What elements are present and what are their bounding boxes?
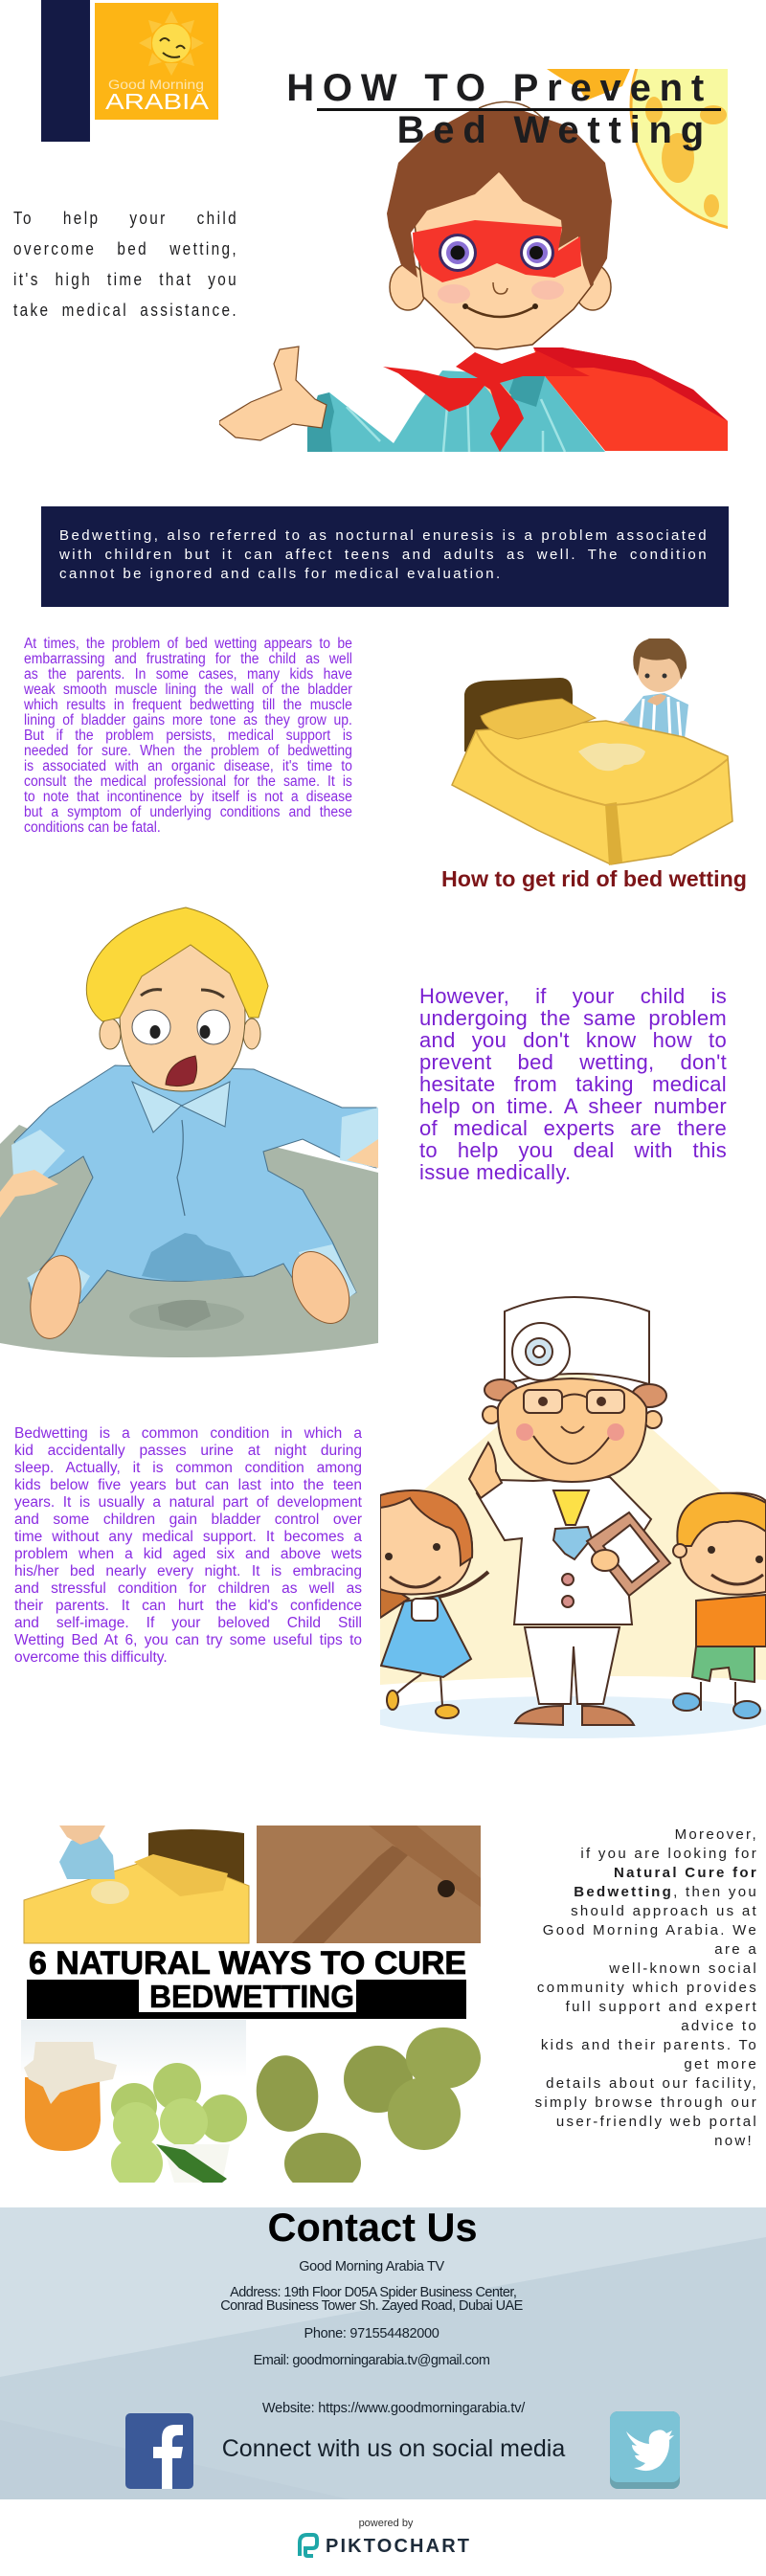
icon: facebook bbox=[125, 2413, 193, 2489]
right-aligned text: about Good Morning Arabia: full support and expert bbox=[566, 1999, 758, 2015]
definition text bbox=[59, 527, 709, 582]
coat bbox=[477, 1477, 651, 1624]
right-aligned text: about Good Morning Arabia bbox=[535, 1826, 758, 2149]
title: Bed Wetting bbox=[397, 109, 712, 151]
title bbox=[286, 67, 712, 151]
Piktochart logo bbox=[298, 2533, 469, 2558]
right-aligned text: about Good Morning Arabia: simply browse through our bbox=[535, 2094, 758, 2111]
finger hand bbox=[469, 1443, 502, 1498]
hero illustration: masked boy with cape bbox=[219, 69, 728, 452]
right-aligned text: about Good Morning Arabia: Bedwetting, then you bbox=[574, 1884, 758, 1900]
panel: definition band bbox=[41, 506, 729, 607]
headline text: 6 NATURAL WAYS TO CURE bbox=[29, 1945, 466, 1982]
intro text: overcome bed wetting, bbox=[13, 239, 238, 258]
nose bbox=[493, 282, 507, 294]
purple paragraph: embarrassment and causes: as the parents. In some cases, many kids have bbox=[24, 666, 352, 683]
purple paragraph: common condition: sleep. Actually, it is common condition among bbox=[14, 1460, 362, 1476]
shoes bbox=[515, 1706, 563, 1725]
headline word: BEDWETTING bbox=[149, 1979, 354, 2014]
shirt bbox=[307, 370, 605, 452]
headline white box bbox=[139, 1980, 356, 2012]
purple paragraph: seek help: hesitate from taking medical bbox=[419, 1072, 727, 1096]
intro text bbox=[13, 209, 238, 320]
panel: contact background bbox=[0, 2207, 766, 2499]
right-aligned text: about Good Morning Arabia: user-friendly web portal bbox=[556, 2114, 758, 2130]
hat bbox=[505, 1297, 649, 1384]
face bbox=[414, 165, 593, 349]
phone: Phone: 971554482000 bbox=[304, 2326, 439, 2341]
eyes bbox=[132, 1010, 170, 1044]
boy's ears bbox=[390, 264, 611, 310]
head bbox=[120, 940, 245, 1091]
purple paragraph: common condition: and self-image. If your beloved Child Still bbox=[14, 1615, 362, 1631]
purple paragraph: common condition: years. It is usually a natural part of development bbox=[14, 1494, 362, 1511]
purple paragraph: embarrassment and causes: consult the medical professional for the same. It is bbox=[24, 773, 352, 790]
purple paragraph: seek help: help on time. A sheer number bbox=[419, 1094, 727, 1118]
purple paragraph: embarrassment and causes: lining of bladder gains more tone as they grow up. bbox=[24, 712, 352, 728]
logo: Good Morning Arabia: ARABIA bbox=[105, 89, 210, 114]
right-aligned text: about Good Morning Arabia: kids and their parents. To bbox=[541, 2037, 758, 2053]
blanket stain bbox=[129, 1302, 244, 1331]
purple paragraph: common condition: Wetting Bed At 6, you can try some useful tips to bbox=[14, 1632, 362, 1648]
bed cover bbox=[452, 721, 732, 864]
purple paragraph: common condition: his/her bed nearly every night. It is embracing bbox=[14, 1563, 362, 1579]
bed folds bbox=[605, 802, 622, 865]
cinnamon photo bbox=[257, 1826, 481, 1943]
eyes bbox=[439, 234, 554, 272]
logo mark bbox=[300, 2535, 317, 2556]
illustration: worried boy on wet blanket bbox=[0, 907, 378, 1357]
wet patch bbox=[142, 1233, 244, 1281]
right-aligned text: about Good Morning Arabia: well-known social bbox=[609, 1960, 758, 1977]
smile bbox=[533, 1436, 610, 1464]
illustration: boy beside wet bed bbox=[441, 638, 747, 891]
cream backdrop bbox=[380, 1359, 766, 1685]
boy bbox=[617, 636, 688, 740]
cuffs bbox=[11, 1130, 65, 1187]
purple paragraph: common condition: kid accidentally passes urine at night during bbox=[14, 1443, 362, 1459]
boy bbox=[673, 1493, 766, 1718]
hands bbox=[0, 1170, 58, 1218]
definition text: cannot be ignored and calls for medical evaluation. bbox=[59, 566, 503, 582]
icon: twitter bbox=[610, 2411, 680, 2489]
scarf bbox=[383, 351, 590, 452]
photo fade background bbox=[21, 2020, 246, 2077]
logo: Good Morning Arabia: Good Morning bbox=[108, 78, 204, 92]
honey jar bbox=[24, 2042, 117, 2151]
tie/stethoscope bbox=[553, 1527, 592, 1559]
ankle cuffs bbox=[27, 1257, 90, 1333]
purple paragraph: seek help: However, if your child is bbox=[419, 984, 727, 1008]
purple paragraph: common condition: Bedwetting is a common condition in which a bbox=[14, 1425, 362, 1442]
purple paragraph: seek help: to help you deal with this bbox=[419, 1138, 727, 1162]
purple paragraph: common condition: their parents. It can hurt the kid's confidence bbox=[14, 1598, 362, 1614]
logo word: PIKTOCHART bbox=[326, 2536, 469, 2557]
purple paragraph: embarrassment and causes bbox=[24, 636, 352, 836]
purple paragraph: embarrassment and causes: At times, the problem of bed wetting appears to be bbox=[24, 636, 352, 652]
ears bbox=[100, 1019, 121, 1049]
collage: 6 natural ways to cure bedwetting bbox=[21, 1826, 481, 2183]
doctor bbox=[469, 1297, 670, 1725]
intro text: take medical assistance. bbox=[13, 301, 238, 320]
right-aligned text: about Good Morning Arabia: should approach us at bbox=[571, 1903, 758, 1919]
glasses bbox=[524, 1390, 562, 1413]
trousers bbox=[525, 1627, 620, 1704]
yellow shirt bbox=[553, 1490, 589, 1525]
purple paragraph: common condition: problem when a kid aged six and above wets bbox=[14, 1546, 362, 1562]
icon: sun bbox=[547, 0, 766, 231]
address: Conrad Business Tower Sh. Zayed Road, Dubai UAE bbox=[220, 2298, 523, 2314]
purple paragraph: embarrassment and causes: but a symptom of underlying conditions and these bbox=[24, 804, 352, 820]
face bbox=[498, 1378, 646, 1482]
right-aligned text: about Good Morning Arabia: community which provides bbox=[537, 1980, 758, 1996]
curly hair bbox=[484, 1379, 517, 1400]
logo: Good Morning Arabia bbox=[95, 3, 218, 120]
smile bbox=[465, 306, 535, 317]
social media label: Connect with us on social media bbox=[222, 2435, 565, 2462]
bed photo bbox=[24, 1826, 249, 1943]
purple paragraph: common condition bbox=[14, 1425, 362, 1666]
contact details bbox=[220, 2259, 525, 2416]
hand thumbs up bbox=[219, 347, 327, 440]
right-aligned text: about Good Morning Arabia: get more bbox=[684, 2056, 758, 2072]
purple paragraph: common condition: time without any medical support. It becomes a bbox=[14, 1529, 362, 1545]
body: pajamas bbox=[14, 1065, 376, 1331]
definition text: with children but it can affect teens and adults as well. The condition bbox=[59, 547, 709, 563]
purple paragraph: embarrassment and causes: which results in frequent bedwetting till the muscle bbox=[24, 697, 352, 713]
right-aligned text: about Good Morning Arabia: advice to bbox=[681, 2018, 758, 2034]
purple paragraph: seek help: issue medically. bbox=[419, 1160, 571, 1184]
intro text: To help your child bbox=[13, 209, 238, 228]
company name: Good Morning Arabia TV bbox=[299, 2259, 444, 2274]
title: HOW TO Prevent bbox=[286, 67, 712, 109]
email: Email: goodmorningarabia.tv@gmail.com bbox=[254, 2353, 489, 2368]
definition text: Bedwetting, also referred to as nocturnal enuresis is a problem associated bbox=[59, 527, 709, 544]
purple paragraph: seek help bbox=[419, 984, 727, 1184]
mouth bbox=[166, 1056, 197, 1086]
shirt sleeve shade bbox=[307, 392, 334, 452]
hair bbox=[387, 108, 612, 287]
mask bbox=[413, 220, 581, 282]
collar bbox=[132, 1082, 230, 1132]
purple paragraph: seek help: undergoing the same problem bbox=[419, 1006, 727, 1030]
purple paragraph: seek help: prevent bed wetting, don't bbox=[419, 1050, 727, 1074]
purple paragraph: seek help: of medical experts are there bbox=[419, 1116, 727, 1140]
purple paragraph: embarrassment and causes: embarrassing and frustrating for the child as well bbox=[24, 651, 352, 667]
website: Website: https://www.goodmorningarabia.tv/ bbox=[262, 2401, 525, 2416]
girl bbox=[380, 1490, 488, 1718]
purple paragraph: embarrassment and causes: is associated with an organic disease, it's time to bbox=[24, 758, 352, 774]
purple paragraph: common condition: kids below five years but can last into the teen bbox=[14, 1477, 362, 1493]
purple paragraph: common condition: and stressful condition for children as well as bbox=[14, 1580, 362, 1597]
right-aligned text: about Good Morning Arabia: details about our facility, bbox=[546, 2075, 758, 2092]
purple paragraph: seek help: and you don't know how to bbox=[419, 1028, 727, 1052]
title underline bbox=[317, 108, 721, 111]
pillow bbox=[481, 699, 596, 739]
navy accent bar bbox=[41, 0, 90, 142]
right-aligned text: about Good Morning Arabia: if you are looking for bbox=[580, 1846, 758, 1862]
blanket bbox=[0, 1125, 378, 1357]
purple paragraph: embarrassment and causes: weak smooth muscle lining the wall of the bladder bbox=[24, 682, 352, 698]
illustration: doctor with two children bbox=[380, 1296, 766, 1738]
headboard bbox=[464, 678, 573, 756]
headline black bar bbox=[27, 1980, 466, 2019]
ears bbox=[483, 1406, 500, 1423]
olives bbox=[251, 2027, 481, 2194]
right-aligned text: about Good Morning Arabia: are a bbox=[714, 1941, 758, 1958]
purple paragraph: common condition: overcome this difficulty. bbox=[14, 1649, 168, 1666]
purple paragraph: embarrassment and causes: But if the problem persists, medical support is bbox=[24, 728, 352, 744]
amla fruit bbox=[111, 2063, 247, 2189]
right-aligned text: about Good Morning Arabia: Natural Cure for bbox=[614, 1865, 758, 1881]
right-aligned text: about Good Morning Arabia: Moreover, bbox=[675, 1826, 758, 1843]
buttons bbox=[562, 1574, 574, 1585]
clipboard bbox=[587, 1512, 670, 1596]
wet stain bbox=[578, 743, 645, 771]
purple paragraph: common condition: and some children gain bladder control over bbox=[14, 1512, 362, 1528]
contact heading: Contact Us bbox=[267, 2205, 478, 2250]
purple paragraph: embarrassment and causes: needed for sure. When the problem of bedwetting bbox=[24, 743, 352, 759]
floor shadow bbox=[367, 1696, 766, 1738]
intro text: it's high time that you bbox=[13, 270, 238, 289]
right-aligned text: about Good Morning Arabia: Good Morning Arabia. We bbox=[543, 1922, 758, 1938]
right-aligned text: about Good Morning Arabia: now! bbox=[714, 2133, 754, 2149]
hand bbox=[592, 1550, 619, 1571]
feet bbox=[23, 1251, 88, 1343]
cape bbox=[533, 347, 728, 451]
hair bbox=[86, 907, 268, 1021]
purple paragraph: embarrassment and causes: conditions can be fatal. bbox=[24, 819, 161, 836]
address: Address: 19th Floor D05A Spider Business Center, bbox=[230, 2285, 516, 2300]
purple paragraph: embarrassment and causes: to note that incontinence by itself is not a disease bbox=[24, 789, 352, 805]
address bbox=[220, 2285, 523, 2314]
powered by: powered by bbox=[359, 2518, 413, 2529]
caption: How to get rid of bed wetting bbox=[441, 866, 747, 891]
